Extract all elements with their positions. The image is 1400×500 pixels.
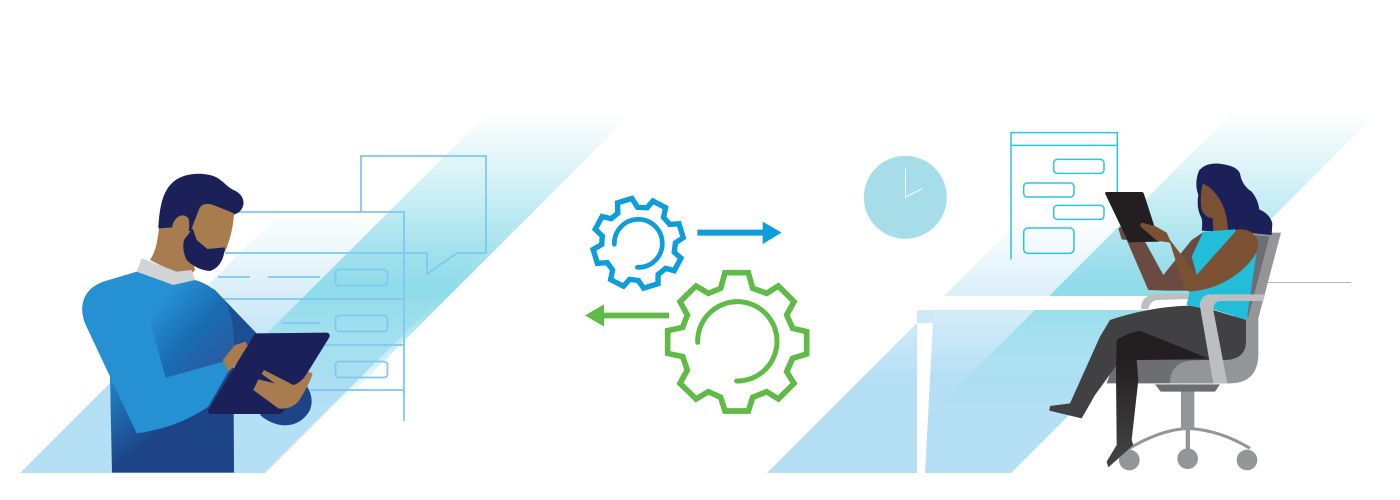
man: ear	[172, 215, 189, 242]
man: hair	[158, 174, 244, 232]
right diagonal background bands	[767, 113, 1377, 473]
right schedule board outline	[1011, 133, 1117, 259]
green gear	[668, 273, 807, 411]
woman: neck and face	[1201, 183, 1228, 232]
woman: crossed leg	[1107, 331, 1208, 467]
left diagonal background bands	[20, 113, 632, 473]
woman: tablet	[1105, 192, 1159, 242]
chair: seat	[1107, 359, 1230, 383]
man: near sleeve	[82, 272, 228, 433]
man: face	[192, 204, 234, 252]
man: chest	[150, 280, 235, 378]
man with tablet	[82, 174, 330, 473]
man: far sleeve	[213, 288, 257, 363]
woman: near leg and skirt	[1049, 306, 1246, 418]
green arrow left	[585, 304, 669, 327]
man: left hand	[223, 342, 248, 372]
left document and speech bubble outline	[218, 156, 486, 421]
woman: top	[1187, 229, 1257, 320]
woman in office chair	[1049, 164, 1281, 470]
woman: near arm and hand	[1140, 223, 1258, 292]
blue gear	[582, 187, 694, 299]
chair: base and wheels	[1119, 384, 1257, 470]
desk	[917, 296, 1189, 473]
man: far elbow	[260, 383, 312, 425]
man: collar	[137, 258, 195, 285]
woman: hair	[1196, 164, 1272, 235]
gears and arrows	[582, 187, 807, 411]
man: lower torso	[110, 347, 234, 473]
chair: back	[1213, 233, 1281, 383]
man: neck	[150, 210, 195, 278]
woman: far hand	[1118, 223, 1131, 241]
man: right hand	[253, 370, 313, 409]
man: beard	[183, 228, 225, 271]
wall clock	[864, 156, 947, 239]
man: tablet	[208, 333, 330, 414]
woman: far arm	[1127, 232, 1204, 291]
chair: front armrest	[1200, 294, 1265, 383]
blue arrow right	[697, 222, 782, 244]
wall line	[1268, 282, 1351, 284]
chair: back armrest	[1141, 293, 1190, 309]
